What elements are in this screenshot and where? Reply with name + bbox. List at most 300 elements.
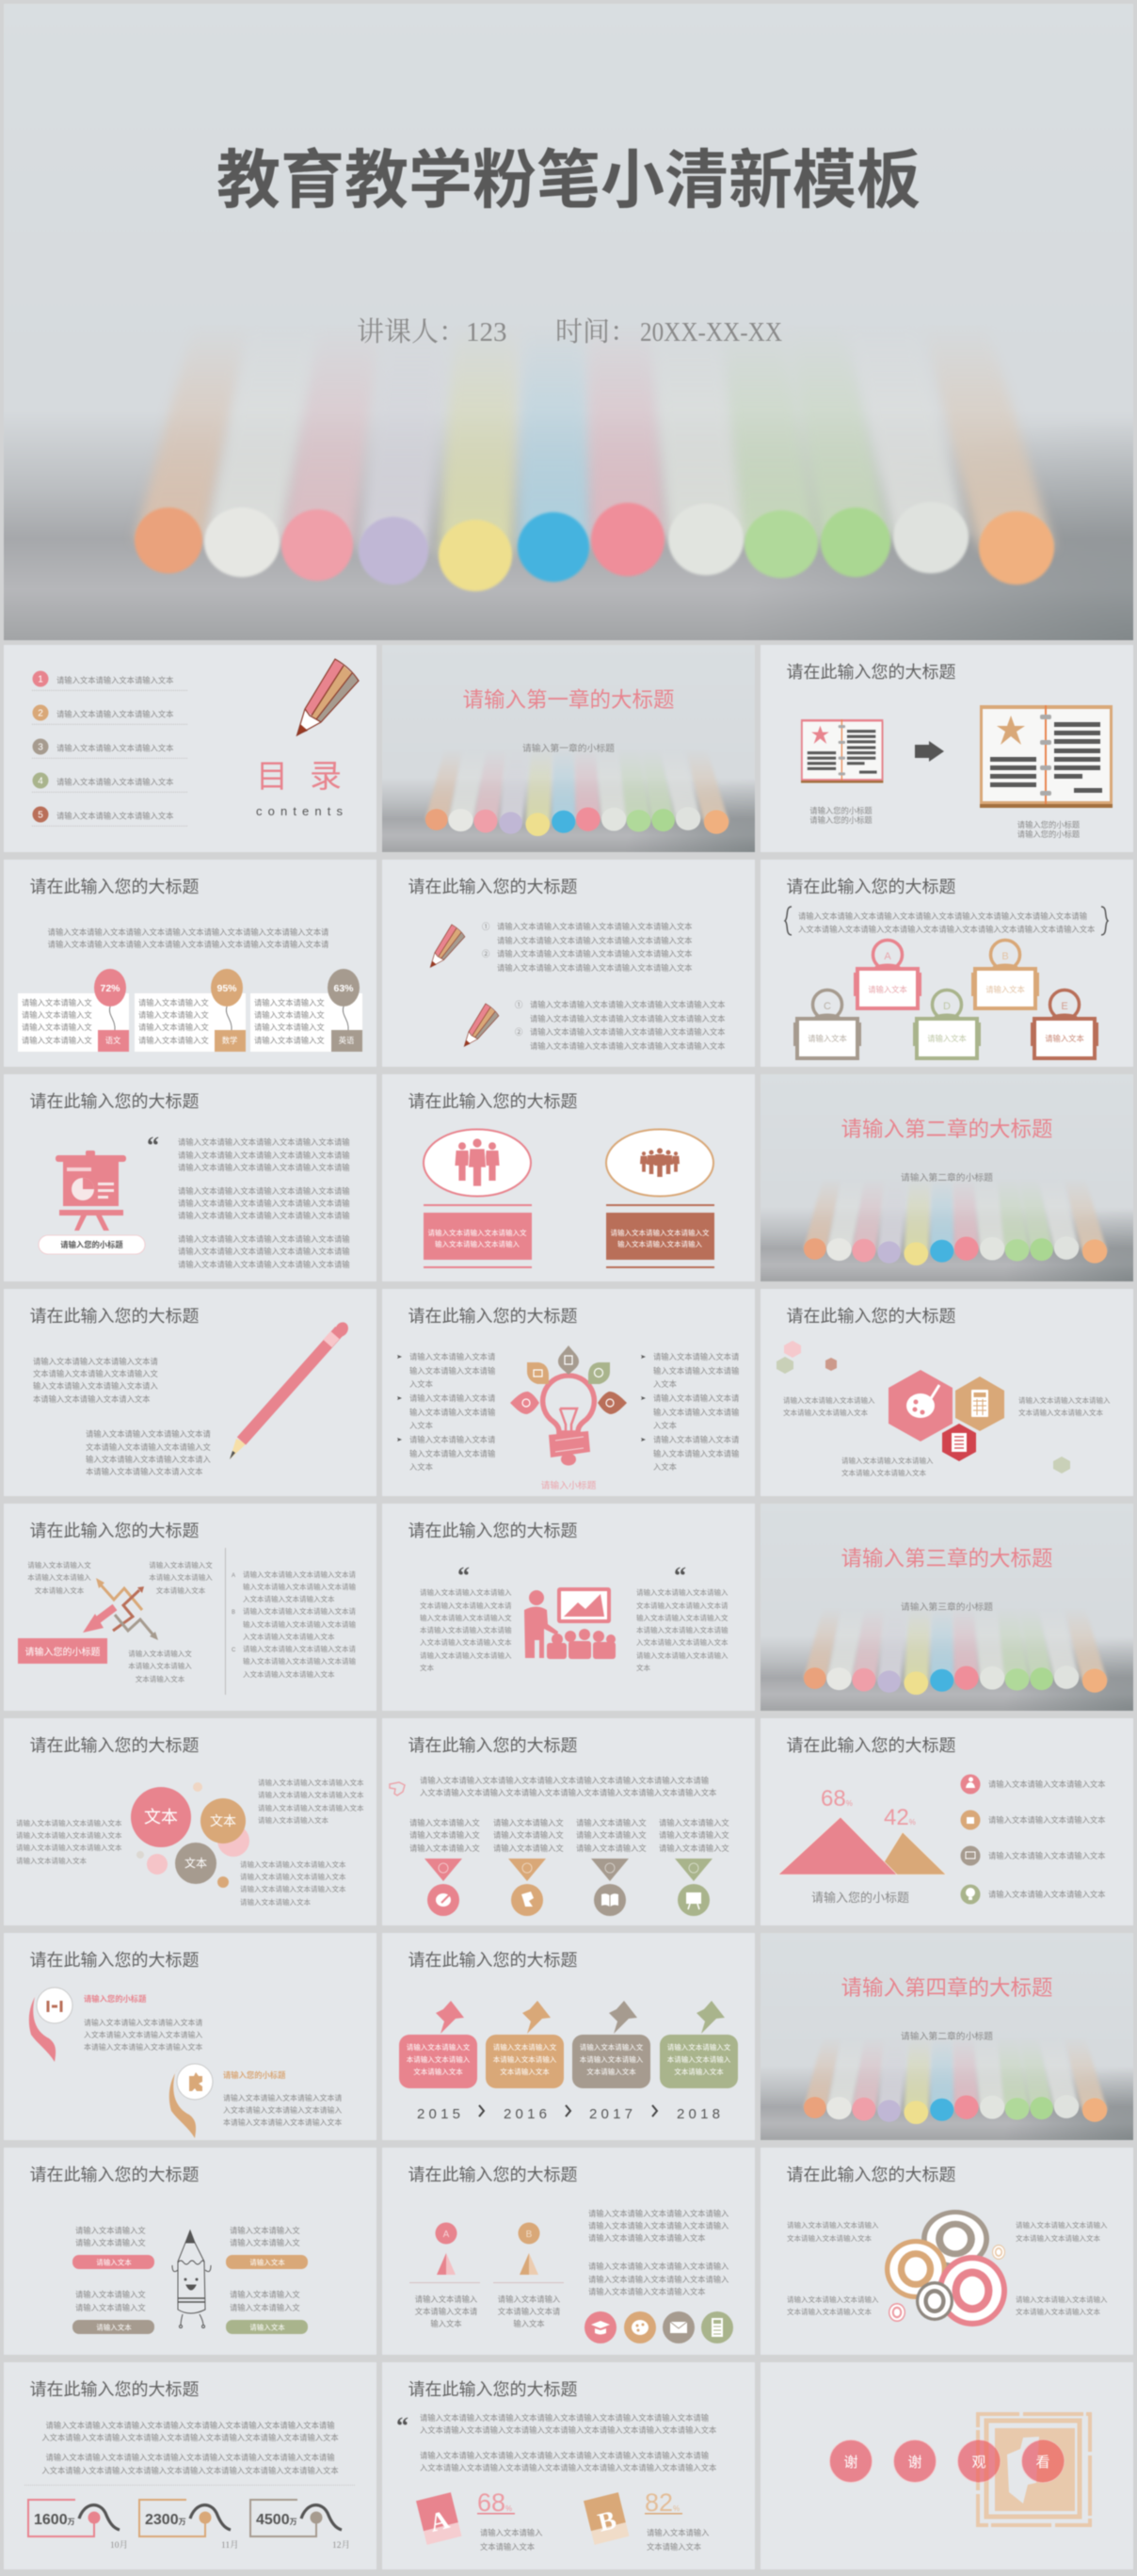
timeline card 2018: 本请输入文本请输入 [667, 2054, 731, 2064]
heading: 请在此输入您的大标题 [408, 1307, 578, 1326]
text block one: 请输入文本请输入文本请输入文本请输入文本请输入文本 [497, 922, 692, 931]
icon: presentation board [56, 1151, 126, 1231]
contents list: 请输入文本请输入文本请输入文本 [56, 710, 173, 719]
text top left: 请输入文本请输入文 [27, 1560, 91, 1570]
text A: 文本请输入文本 [480, 2542, 535, 2552]
team one [424, 1130, 531, 1196]
column 2: 请输入文本请输入文 [493, 1843, 564, 1853]
icon list: 请输入文本请输入文本请输入文本 [988, 1815, 1105, 1825]
contents list: 3 [38, 742, 43, 753]
paragraph text: 请输入文本请输入文本请输入文本请输入文本请输入文本请输入文本请输入文本请输 [45, 2421, 335, 2430]
left bullet list: 入文本 [409, 1379, 433, 1389]
timeline card 2017: 请输入文本请输入文 [580, 2042, 644, 2052]
text right: 入文本请输入文本请输入文本 [636, 1637, 729, 1647]
block bottom right: 请输入文本请输入文 [230, 2303, 300, 2312]
panel: book comparison [761, 645, 1133, 852]
text top right [1016, 2220, 1108, 2243]
quote mark: “ [147, 1132, 159, 1159]
pyramid B: 请输入文本请输入 [498, 2294, 560, 2304]
text top right: 文本请输入文本 [156, 1586, 206, 1595]
paragraphs: 请输入文本请输入文本请输入文本请输入文本请输入文本请输入文本请输入文本请输 [420, 2413, 710, 2423]
panel: chapter two [761, 1074, 1133, 1281]
left bullet list: 请输入文本请输入文本请 [409, 1393, 495, 1403]
block one title: 请输入您的小标题 [84, 1994, 147, 2004]
contents list: 请输入文本请输入文本请输入文本 [56, 812, 173, 821]
tag E [1031, 990, 1098, 1058]
list: 输入文本请输入文本请输入文本请输 [243, 1582, 356, 1591]
panel: teacher [382, 1504, 755, 1711]
stat November [139, 2500, 239, 2551]
tag C: C [824, 1001, 831, 1012]
value 82: 82% [645, 2488, 680, 2517]
panel: mountain percentages [761, 1718, 1133, 1925]
block bottom right: 请输入文本请输入文 [230, 2290, 300, 2299]
subtitle pill [39, 1235, 145, 1254]
text left [783, 1395, 875, 1417]
contents list: 请输入文本请输入文本请输入文本 [56, 676, 173, 685]
years: 2017 [589, 2106, 633, 2122]
text block one: 请输入文本请输入文本请输入文本请输入文本请输入文本 [497, 949, 692, 958]
card: maths: 请输入文本请输入文 [138, 1010, 209, 1020]
block one text: 入文本请输入文本请输入文本请输入 [84, 2030, 202, 2039]
intro text: 入文本请输入文本请输入文本请输入文本请输入文本请输入文本请输入文本请输入文本 [420, 1788, 716, 1797]
tile A [416, 2492, 461, 2545]
heading: 请在此输入您的大标题 [787, 1736, 956, 1755]
quote mark: “ [396, 2412, 408, 2439]
heading: 请在此输入您的大标题 [408, 1092, 578, 1111]
text top right: 请输入文本请输入文本请输入文本 [258, 1790, 364, 1799]
text right: 请输入文本请输入文本请输入文本请输入 [588, 2221, 729, 2230]
icon: pencil two [464, 1004, 499, 1046]
card: language: 72% [100, 983, 120, 994]
presenter and date: 20XX-XX-XX [640, 317, 782, 347]
text right: 文本 [636, 1663, 650, 1672]
stat December: 12月 [332, 2540, 350, 2551]
text bottom: 文本请输入文本请输入文本 [841, 1468, 926, 1477]
timeline card 2017: 本请输入文本请输入 [580, 2054, 644, 2064]
contents list: 请输入文本请输入文本请输入文本 [56, 744, 173, 753]
subtitle box: 请输入您的小标题 [24, 1646, 100, 1658]
text block two: 请输入文本请输入文本请输入文本请输入文本请输入文本 [530, 1000, 725, 1009]
block top left: 请输入文本请输入文 [75, 2226, 146, 2235]
text bottom left: 请输入文本请输入文本请输入 [787, 2294, 879, 2304]
years: 2018 [677, 2106, 720, 2122]
column 1 [409, 1818, 480, 1916]
heading: 请在此输入您的大标题 [30, 877, 200, 896]
paragraph text [41, 2421, 339, 2475]
text bottom left [787, 2294, 879, 2316]
text right [636, 1587, 729, 1672]
tag E: 请输入文本 [1045, 1034, 1084, 1043]
text right: 请输入文本请输入文本请输入文本请输入 [588, 2209, 729, 2218]
text bottom left: 文本请输入文本请输入文本 [787, 2307, 872, 2316]
contents list: 5 [38, 810, 43, 821]
text bottom right [1016, 2294, 1108, 2316]
block top right: 请输入文本 [249, 2258, 285, 2267]
block two text: 请输入文本请输入文本请输入文本请 [223, 2093, 342, 2102]
text A: 请输入文本请输入 [480, 2528, 542, 2537]
block bottom right [226, 2290, 308, 2334]
intro text: 入文本请输入文本请输入文本请输入文本请输入文本请输入文本请输入文本请输入文本 [798, 925, 1095, 934]
right bullet list: 请输入文本请输入文本请 [653, 1435, 739, 1444]
icon: long pencil [230, 1320, 351, 1459]
presenter and date [357, 316, 782, 347]
block top right: 请输入文本请输入文 [230, 2238, 300, 2247]
list: 请输入文本请输入文本请输入文本请 [243, 1644, 356, 1653]
contents list: 4 [38, 776, 43, 787]
card: english [250, 969, 362, 1052]
card: english: 请输入文本请输入文 [254, 1022, 325, 1032]
tag B [971, 940, 1039, 1008]
bubble cluster: 文本 [144, 1808, 178, 1827]
text bottom: 本请输入文本请输入 [128, 1661, 192, 1670]
panel: four columns [382, 1718, 755, 1925]
card: language: 请输入文本请输入文 [22, 998, 92, 1007]
text block one: ① [482, 922, 490, 931]
timeline card 2016 [486, 2001, 564, 2088]
text bottom right: 请输入文本请输入文本请输入 [1016, 2294, 1108, 2304]
text B: 请输入文本请输入 [647, 2528, 709, 2537]
text card one: 输入文本请输入文本请输入 [435, 1239, 520, 1248]
text block top: 请输入文本请输入文本请输入文本请 [33, 1357, 158, 1366]
text top right: 请输入文本请输入文本 [258, 1815, 328, 1825]
large book caption: 请输入您的小标题 [1017, 820, 1080, 829]
intro text: 请输入文本请输入文本请输入文本请输入文本请输入文本请输入文本请输入文本请输 [798, 911, 1088, 921]
card: language [18, 969, 129, 1052]
text B [647, 2528, 709, 2552]
text top right: 文本请输入文本请输入文本 [1016, 2233, 1100, 2243]
block one text: 请输入文本请输入文本请输入文本请 [84, 2018, 202, 2027]
text right: 文本请输入文本请输入文本 [1018, 1408, 1103, 1417]
panel: diagonal pencil [4, 1289, 376, 1496]
card: english: 63% [333, 983, 354, 994]
card: language: 语文 [105, 1036, 121, 1045]
tag B: 请输入文本 [985, 985, 1025, 994]
panel: hexagons [761, 1289, 1133, 1496]
small book caption: 请输入您的小标题 [809, 815, 873, 825]
right bullet list: 请输入文本请输入文本请 [653, 1393, 739, 1403]
text left: 本请输入文本请输入文本请输 [420, 1625, 512, 1634]
heading: 请在此输入您的大标题 [408, 1951, 578, 1970]
left bullet list: 请输入文本请输入文本请 [409, 1352, 495, 1361]
years: 2015 [417, 2106, 460, 2122]
thank you circles: 看 [1035, 2455, 1050, 2471]
card: maths: 数学 [222, 1036, 237, 1045]
heading: 请在此输入您的大标题 [787, 1307, 956, 1326]
timeline card 2016: 文本请输入文本 [500, 2067, 550, 2076]
card: language: 请输入文本请输入文 [22, 1010, 92, 1020]
cover title: 教育教学粉笔小清新模板 [216, 145, 921, 217]
icon: lightbulb [543, 1376, 594, 1465]
contents heading: 录 [310, 759, 342, 795]
icon: pointing hand [390, 1782, 405, 1795]
text bottom right [240, 1860, 346, 1907]
thank you circles: 观 [971, 2455, 986, 2471]
text card two [606, 1204, 714, 1268]
block two text: 入文本请输入文本请输入文本请输入 [223, 2105, 342, 2115]
card: maths: 请输入文本请输入文 [138, 1036, 209, 1045]
hex: palette [889, 1370, 953, 1441]
list: 输入文本请输入文本请输入文本请输 [243, 1656, 356, 1666]
text top left: 文本请输入文本 [35, 1586, 85, 1595]
years [417, 2106, 720, 2122]
block bottom left [72, 2290, 154, 2334]
list: 输入文本请输入文本请输入文本请输 [243, 1619, 356, 1629]
icon: small book [801, 719, 883, 783]
stat December [250, 2500, 350, 2551]
paragraphs: 请输入文本请输入文本请输入文本请输入文本请输 [178, 1137, 350, 1147]
icon: pencil [297, 659, 359, 735]
column 4: 请输入文本请输入文 [659, 1818, 729, 1827]
pyramid B: B [526, 2230, 533, 2240]
text block one: 请输入文本请输入文本请输入文本请输入文本请输入文本 [497, 963, 692, 973]
heading: 请在此输入您的大标题 [30, 1736, 200, 1755]
chapter title: 请输入第四章的大标题 [841, 1976, 1053, 2000]
paragraph text: 入文本请输入文本请输入文本请输入文本请输入文本请输入文本请输入文本请输入文本 [41, 2433, 339, 2442]
stat November: 2300万 [145, 2512, 186, 2528]
text left: 请输入文本请输入文本请输入 [783, 1395, 875, 1405]
left bullet list: 请输入文本请输入文本请 [409, 1435, 495, 1444]
column 2: 请输入文本请输入文 [493, 1818, 564, 1827]
list [232, 1570, 356, 1679]
right bullet list: 请输入文本请输入文本请 [653, 1352, 739, 1361]
block top left: 请输入文本请输入文 [75, 2238, 146, 2247]
text bottom [128, 1649, 192, 1683]
stat October: 1600万 [34, 2512, 75, 2528]
panel: team ovals [382, 1074, 755, 1281]
text block two: ① [515, 1000, 523, 1009]
icon list [960, 1774, 1105, 1904]
icon list: 请输入文本请输入文本请输入文本 [988, 1851, 1105, 1860]
timeline card 2016: 请输入文本请输入文 [493, 2042, 557, 2052]
ribbon icon one [29, 1988, 72, 2062]
right bullet list: 入文本 [653, 1462, 677, 1472]
chapter title: 请输入第一章的大标题 [462, 688, 675, 712]
right bullet list: 输入文本请输入文本请输 [653, 1366, 740, 1376]
presenter and date: 时间： [555, 316, 637, 347]
panel: A and B pyramids [382, 2148, 755, 2355]
years: 2016 [504, 2106, 547, 2122]
text A [480, 2528, 542, 2552]
column 1: 请输入文本请输入文 [409, 1830, 480, 1840]
arrow [915, 741, 944, 762]
text block two: 请输入文本请输入文本请输入文本请输入文本请输入文本 [530, 1014, 725, 1023]
chapter subtitle: 请输入第一章的小标题 [522, 742, 615, 754]
text right: 输入文本请输入文本请输入文 [636, 1613, 729, 1622]
paragraphs: 入文本请输入文本请输入文本请输入文本请输入文本请输入文本请输入文本请输入文本 [420, 2463, 716, 2472]
text card one: 请输入文本请输入文本请输入文 [427, 1228, 527, 1237]
list: C [232, 1648, 236, 1653]
thank you circles [828, 2439, 1065, 2484]
right bullet list [641, 1352, 740, 1472]
tag D: D [943, 1001, 951, 1012]
text bottom [841, 1456, 934, 1477]
list: 请输入文本请输入文本请输入文本请 [243, 1570, 356, 1579]
heading: 请在此输入您的大标题 [30, 2165, 200, 2184]
text right: 请输入文本请输入文本请输入 [636, 1587, 729, 1597]
hex: calculator [955, 1377, 1004, 1431]
tile A: A [427, 2505, 453, 2538]
text block top [33, 1357, 158, 1404]
panel: balloon percentages [4, 860, 376, 1067]
heading: 请在此输入您的大标题 [408, 1521, 578, 1540]
icon: idea leaves [510, 1345, 627, 1414]
text block two: ② [515, 1027, 523, 1037]
heading: 请在此输入您的大标题 [30, 1521, 200, 1540]
list: 入文本请输入文本请输入文本 [243, 1594, 335, 1603]
text block two [515, 1000, 725, 1051]
paragraphs: 请输入文本请输入文本请输入文本请输入文本请输 [178, 1163, 350, 1172]
card: english: 请输入文本请输入文 [254, 1036, 325, 1045]
tag C: 请输入文本 [808, 1034, 847, 1043]
chalk photo [761, 1074, 1133, 1281]
contents subheading: contents [256, 804, 343, 818]
paragraphs: 入文本请输入文本请输入文本请输入文本请输入文本请输入文本请输入文本请输入文本 [420, 2425, 716, 2435]
icon list: 请输入文本请输入文本请输入文本 [988, 1779, 1105, 1789]
intro text: 请输入文本请输入文本请输入文本请输入文本请输入文本请输入文本请输入文本请 [48, 940, 328, 949]
panel: lightbulb [382, 1289, 755, 1496]
card: maths: 请输入文本请输入文 [138, 998, 209, 1007]
paragraphs: 请输入文本请输入文本请输入文本请输入文本请输 [178, 1151, 350, 1160]
tag E: E [1061, 1001, 1068, 1012]
text top right [149, 1560, 213, 1595]
text left: 请输入文本请输入文本请输入 [420, 1587, 512, 1597]
text right: 文本请输入文本请输入文本请 [636, 1601, 729, 1610]
heading: 请在此输入您的大标题 [787, 663, 956, 682]
text left: 文本请输入文本请输入文本 [783, 1408, 868, 1417]
text block top: 文本请输入文本请输入文本请输入文 [33, 1369, 158, 1378]
small book caption [809, 806, 873, 825]
tag A: 请输入文本 [868, 985, 907, 994]
intro text: 请输入文本请输入文本请输入文本请输入文本请输入文本请输入文本请输入文本请 [48, 927, 328, 937]
text top left: 文本请输入文本请输入文本 [787, 2233, 872, 2243]
heading: 请在此输入您的大标题 [408, 1736, 578, 1755]
tile B: B [595, 2505, 619, 2538]
stat October: 10月 [110, 2540, 128, 2551]
icon list: 请输入文本请输入文本请输入文本 [988, 1890, 1105, 1899]
card: english: 请输入文本请输入文 [254, 998, 325, 1007]
timeline card 2018: 文本请输入文本 [674, 2067, 724, 2076]
paragraph text: 入文本请输入文本请输入文本请输入文本请输入文本请输入文本请输入文本请输入文本 [41, 2466, 339, 2475]
left bullet list: 输入文本请输入文本请输 [409, 1408, 496, 1417]
panel: presentation board [4, 1074, 376, 1281]
panel: lettered tags [761, 860, 1133, 1067]
column 4 [659, 1818, 729, 1916]
text B: 文本请输入文本 [647, 2542, 701, 2552]
paragraphs: 请输入文本请输入文本请输入文本请输入文本请输 [178, 1247, 350, 1256]
text right: 请输入文本请输入文本请输入文本请输入 [588, 2262, 729, 2271]
block one text: 本请输入文本请输入文本请输入文本 [84, 2042, 202, 2052]
list: 入文本请输入文本请输入文本 [243, 1632, 335, 1641]
text bottom right: 请输入文本请输入文本请输入文本 [240, 1884, 346, 1893]
timeline card 2015: 请输入文本请输入文 [407, 2042, 471, 2052]
chalk photo [382, 645, 755, 852]
text right: 请输入文本请输入文本请输入 [636, 1650, 729, 1660]
text top right: 请输入文本请输入文本请输入文本 [258, 1803, 364, 1812]
tag D [913, 990, 981, 1058]
text left: 请输入文本请输入文本请输入文本 [16, 1830, 122, 1840]
decorative hexes [777, 1341, 1070, 1473]
pyramid B: 文本请输入文本请 [498, 2307, 560, 2316]
heading: 请在此输入您的大标题 [787, 2165, 956, 2184]
column 3: 请输入文本请输入文 [576, 1830, 647, 1840]
braces [785, 907, 1108, 935]
text top left: 请输入文本请输入文本请输入 [787, 2220, 879, 2230]
heading: 请在此输入您的大标题 [787, 877, 956, 896]
timeline card 2017: 文本请输入文本 [586, 2067, 636, 2076]
column 2 [493, 1818, 564, 1916]
tag A [854, 940, 921, 1008]
card: maths: 请输入文本请输入文 [138, 1022, 209, 1032]
text left: 入文本请输入文本请输入文本 [420, 1637, 512, 1647]
year chevrons [479, 2105, 657, 2117]
contents list [32, 670, 188, 826]
column 3 [576, 1818, 647, 1916]
text block two: 请输入文本请输入文本请输入文本请输入文本请输入文本 [530, 1041, 725, 1051]
tag D: 请输入文本 [927, 1034, 967, 1043]
column 4: 请输入文本请输入文 [659, 1830, 729, 1840]
text right: 请输入文本请输入文本请输入文本 [588, 2287, 705, 2296]
text left: 请输入文本请输入文本请输入 [420, 1650, 512, 1660]
tile B [584, 2492, 629, 2545]
card: english: 请输入文本请输入文 [254, 1010, 325, 1020]
card: language: 请输入文本请输入文 [22, 1022, 92, 1032]
paragraphs: 请输入文本请输入文本请输入文本请输入文本请输 [178, 1199, 350, 1208]
text left: 输入文本请输入文本请输入文 [420, 1613, 512, 1622]
block bottom right: 请输入文本 [249, 2322, 285, 2331]
column 1: 请输入文本请输入文 [409, 1818, 480, 1827]
heading: 请在此输入您的大标题 [408, 2165, 578, 2184]
block top right: 请输入文本请输入文 [230, 2226, 300, 2235]
text card two: 输入文本请输入文本请输入 [617, 1239, 702, 1248]
text top left: 本请输入文本请输入 [27, 1572, 91, 1582]
text block bottom: 本请输入文本请输入文本请入文本 [86, 1467, 202, 1476]
subtitle pill: 请输入您的小标题 [60, 1240, 123, 1249]
panel: cover slide [4, 4, 1133, 640]
intro text: 请输入文本请输入文本请输入文本请输入文本请输入文本请输入文本请输入文本请输 [420, 1776, 710, 1785]
small book caption: 请输入您的小标题 [809, 806, 873, 815]
paragraphs [178, 1137, 350, 1269]
contents heading [256, 759, 342, 795]
stat December: 4500万 [256, 2512, 297, 2528]
panel: chapter three [761, 1504, 1133, 1711]
pyramid A: 输入文本 [430, 2319, 462, 2328]
card: maths [135, 969, 246, 1052]
paragraphs: 请输入文本请输入文本请输入文本请输入文本请输 [178, 1211, 350, 1220]
tag A: A [884, 951, 891, 962]
tag C [793, 990, 861, 1058]
text block two: 请输入文本请输入文本请输入文本请输入文本请输入文本 [530, 1027, 725, 1037]
list: 入文本请输入文本请输入文本 [243, 1669, 335, 1679]
chapter title: 请输入第二章的大标题 [841, 1118, 1053, 1141]
text right: 请输入文本请输入文本请输入 [1018, 1395, 1111, 1405]
icon row [585, 2311, 733, 2343]
text card one [424, 1204, 532, 1268]
text left: 请输入文本请输入文本请输入文本 [16, 1843, 122, 1852]
text left [420, 1587, 512, 1672]
chalk photo background [4, 4, 1133, 640]
left bullet list: 入文本 [409, 1462, 433, 1472]
paragraphs: 请输入文本请输入文本请输入文本请输入文本请输 [178, 1234, 350, 1244]
text block bottom: 文本请输入文本请输入文本请输入文 [86, 1442, 211, 1452]
heading: 请在此输入您的大标题 [408, 2380, 578, 2399]
column 2: 请输入文本请输入文 [493, 1830, 564, 1840]
timeline card 2018: 请输入文本请输入文 [667, 2042, 731, 2052]
heading: 请在此输入您的大标题 [408, 877, 578, 896]
subtitle box [18, 1638, 107, 1664]
caption: 请输入小标题 [541, 1479, 597, 1491]
text top left [27, 1560, 91, 1595]
